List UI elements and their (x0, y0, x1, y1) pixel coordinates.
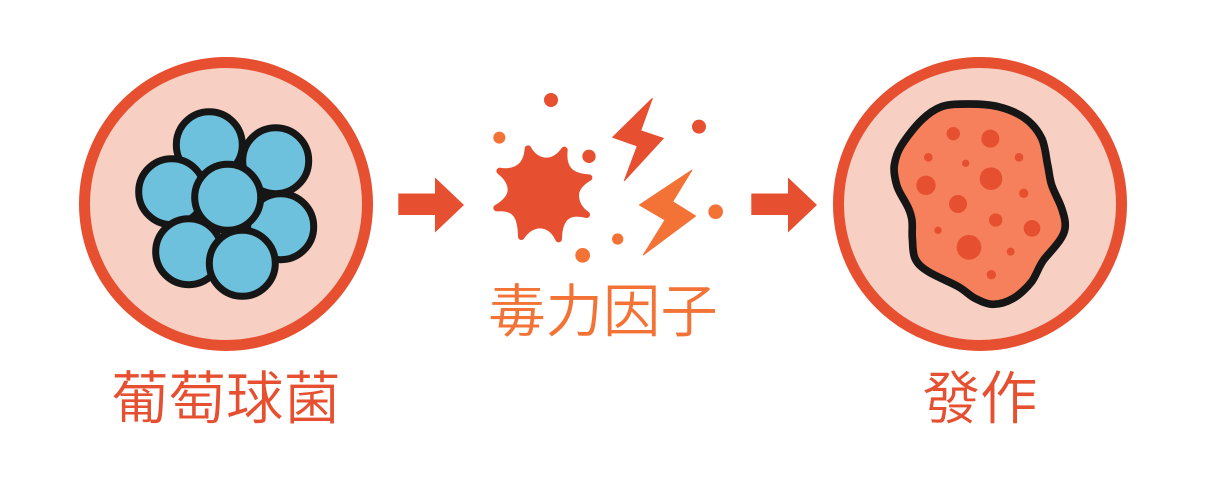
circle: outbreak background (838, 62, 1122, 346)
arrow: bacteria to virulence factors (398, 178, 464, 232)
icon: red lightning bolt (613, 98, 663, 181)
arrow: virulence factors to outbreak (751, 178, 817, 232)
icon: bacteria cluster (139, 112, 314, 296)
particles (493, 93, 723, 263)
heading: virulence factors: 毒力因子 (488, 280, 718, 344)
circle: staphylococcus background (84, 62, 368, 346)
panel: outbreak (838, 62, 1122, 346)
heading: outbreak: 發作 (923, 368, 1037, 432)
heading: staphylococcus: 葡萄球菌 (111, 368, 341, 432)
icon: burst (497, 149, 589, 239)
panel: staphylococcus (84, 62, 368, 346)
panel: virulence factors (493, 93, 723, 263)
icon: orange lightning bolt (639, 170, 696, 255)
icon: inflamed lesion (894, 104, 1065, 304)
